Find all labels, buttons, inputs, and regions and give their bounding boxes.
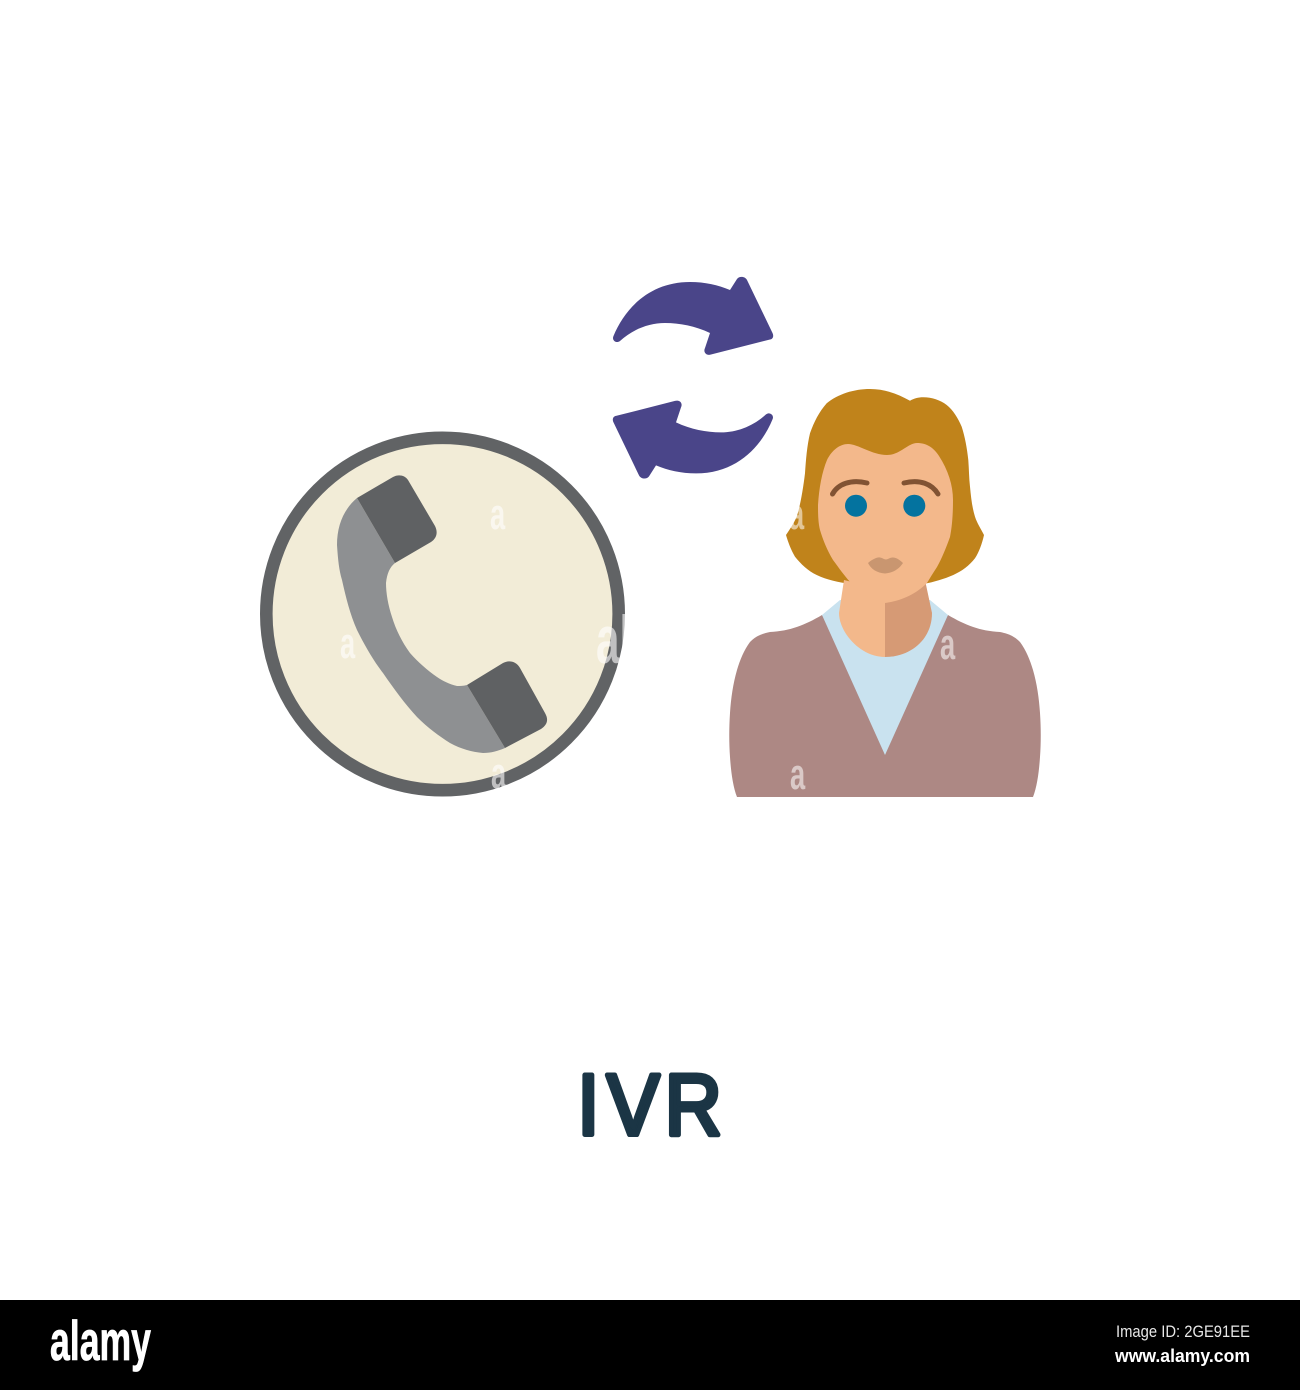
- woman hair: [786, 389, 984, 584]
- footer logo: alamy: [50, 1309, 151, 1372]
- icon: woman avatar: [729, 389, 1041, 799]
- watermark letters on woman: a: [790, 749, 806, 799]
- watermark letters on circle: al: [596, 602, 631, 677]
- icon: phone in circle: [266, 438, 631, 798]
- icon: exchange arrows: [613, 277, 773, 479]
- arrow: top, pointing right: [613, 277, 773, 355]
- title: I: [577, 1056, 599, 1153]
- watermark letters on circle: [340, 489, 631, 798]
- title: V: [607, 1056, 660, 1153]
- website: www.alamy.com: [1114, 1346, 1250, 1366]
- woman left eyebrow: [832, 482, 867, 494]
- woman face: [818, 443, 953, 603]
- image id: Image ID: 2GE91EE: [1116, 1322, 1250, 1341]
- handset lower mouthpiece: [467, 661, 547, 748]
- icon: handset: [337, 475, 547, 753]
- woman left eye: [845, 495, 867, 517]
- woman lips: [868, 557, 903, 574]
- watermark letters on woman: a: [789, 489, 805, 539]
- arrow: bottom, pointing left: [613, 401, 773, 479]
- woman neck: [839, 580, 885, 657]
- watermark letters on circle: a: [490, 489, 506, 539]
- woman right eyebrow: [904, 482, 938, 494]
- woman neck shadow: [885, 580, 932, 657]
- woman jacket: [729, 615, 1041, 797]
- watermark letters on circle: a: [340, 618, 356, 668]
- watermark letters on woman: [789, 489, 956, 799]
- footer bar: [0, 1300, 1300, 1390]
- watermark letters on circle: a: [491, 748, 507, 798]
- handset upper earpiece: [357, 475, 437, 563]
- watermark letters on woman: a: [940, 619, 956, 669]
- handset curved body: [337, 498, 505, 753]
- woman shirt: [822, 600, 948, 755]
- woman right eye: [903, 495, 925, 517]
- phone circle badge: [266, 438, 619, 790]
- title: R: [665, 1056, 722, 1153]
